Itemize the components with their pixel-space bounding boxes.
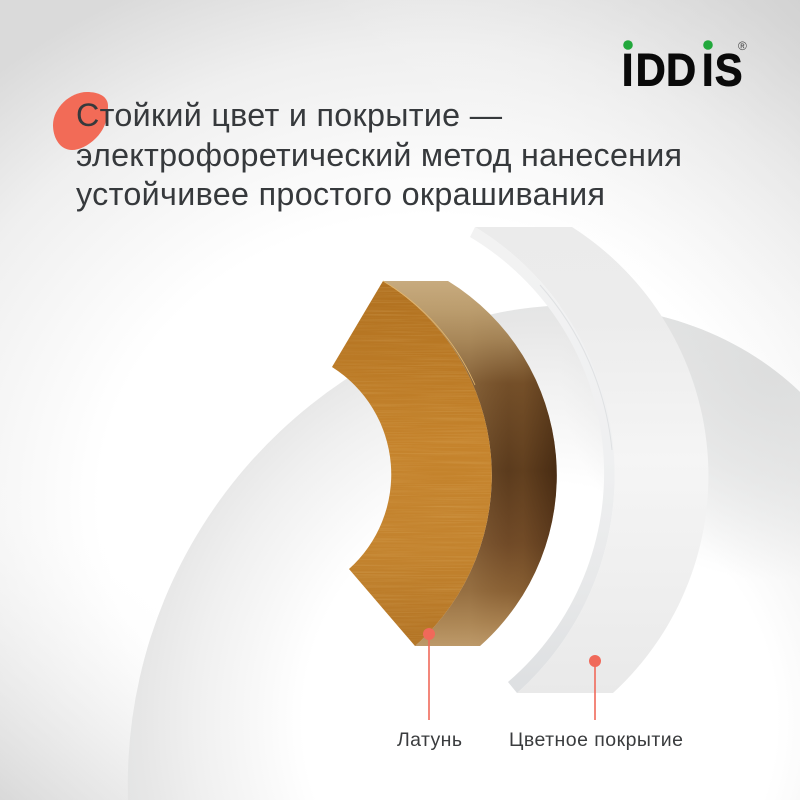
callout dot [589,655,601,667]
brass edge highlight [383,281,475,385]
background arc shape [128,305,800,800]
registered mark: ® [738,39,747,53]
IDDIS logo [622,39,747,96]
title: Стойкий цвет и покрытие — [76,97,503,133]
brass side face [383,281,557,646]
coating ridge line [540,285,612,450]
coral blob accent [53,92,108,150]
callout label: Латунь [397,729,462,751]
brass side sheen [383,281,557,646]
title [76,97,682,212]
callout: colour coating [509,655,683,751]
logo wordmark: IDDIS [622,46,742,96]
callout label: Цветное покрытие [509,729,683,751]
callout: brass [397,628,462,751]
callout pin [594,661,596,720]
logo green dots [623,40,713,50]
coating outer band [475,227,708,693]
brass segment [330,280,557,648]
title: электрофоретический метод нанесения [76,137,682,173]
brass front face [332,281,492,646]
white colour coating segment [470,227,708,693]
callout dot [423,628,435,640]
title: устойчивее простого окрашивания [76,176,605,212]
coating inner rim [470,227,615,693]
brushed metal texture [330,280,495,648]
callout pin [428,634,430,720]
